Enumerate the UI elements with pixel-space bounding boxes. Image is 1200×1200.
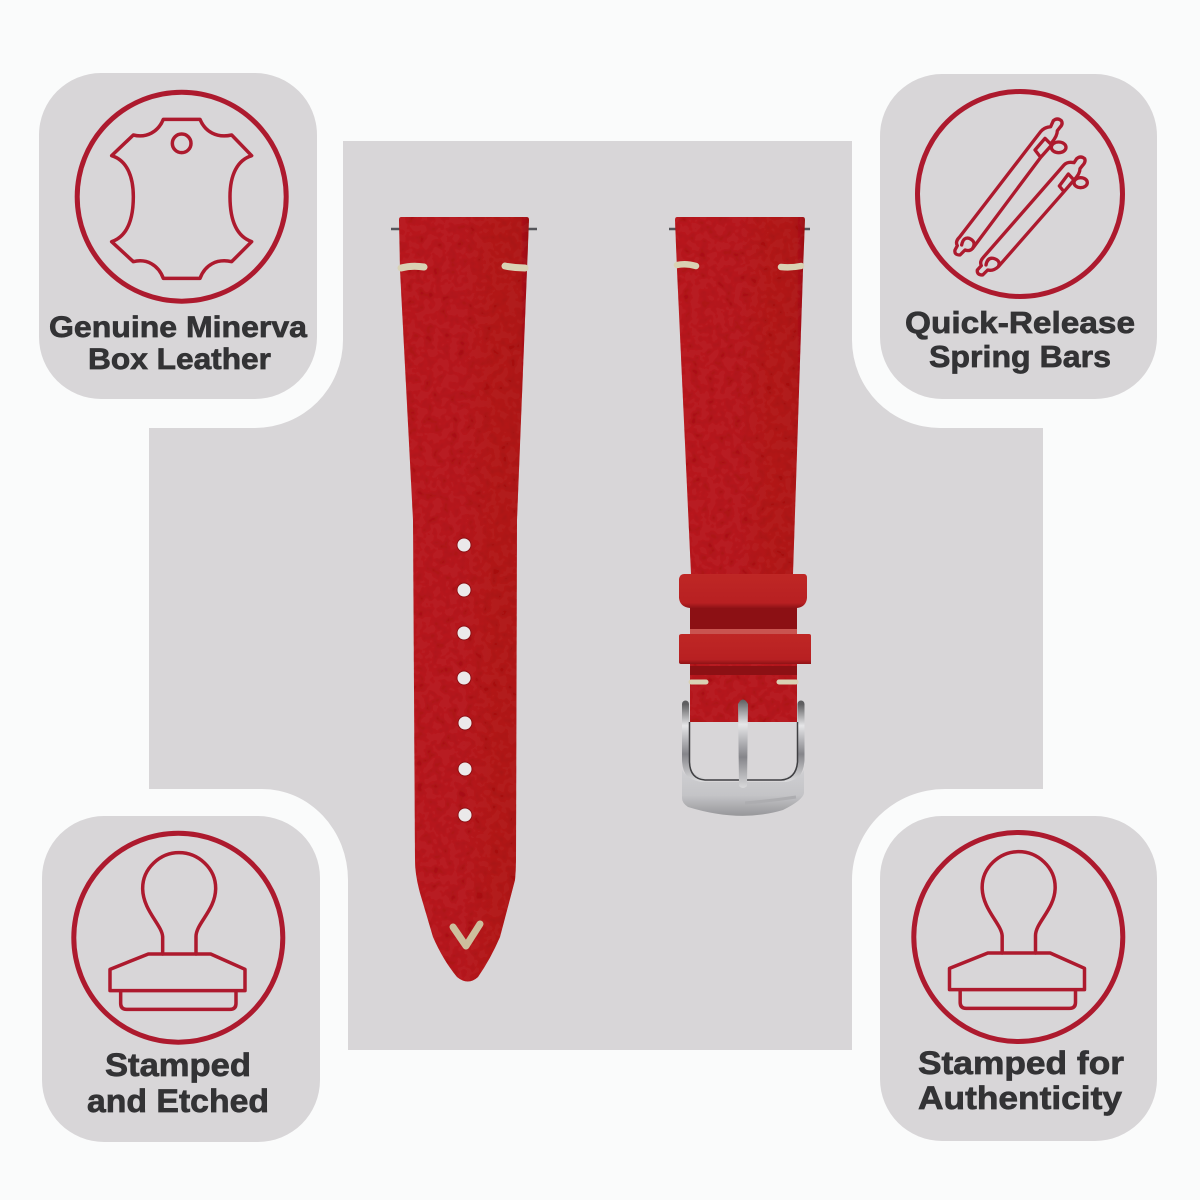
dark strap section between keepers bbox=[690, 604, 797, 638]
card background bbox=[39, 73, 317, 399]
card: genuine leather bbox=[39, 73, 317, 399]
leather body of buckle piece bbox=[675, 217, 805, 574]
buckle inner edge bbox=[690, 722, 798, 780]
stitches at top of long piece bbox=[401, 266, 525, 268]
card background bbox=[880, 74, 1157, 399]
card background bbox=[42, 816, 320, 1142]
central cross-shaped panel bbox=[149, 141, 1043, 1050]
card label: Stamped bbox=[105, 1047, 251, 1083]
card: stamped for authenticity bbox=[880, 816, 1157, 1141]
leather body of long piece bbox=[399, 217, 529, 982]
shadow under lower keeper bbox=[690, 666, 797, 675]
lower strap section bbox=[690, 664, 797, 722]
watch strap: buckle piece bbox=[669, 217, 811, 816]
stitches at top of buckle piece bbox=[677, 264, 801, 267]
keeper two bbox=[679, 634, 811, 664]
pin tips of long piece bbox=[391, 228, 537, 230]
engraved mark on buckle bbox=[745, 797, 796, 803]
card label: Quick-Release bbox=[905, 305, 1135, 340]
card label bbox=[905, 305, 1135, 374]
pin tips of buckle piece bbox=[669, 228, 810, 230]
card: spring bars bbox=[880, 74, 1157, 399]
buckle frame sides bbox=[686, 704, 801, 781]
card: stamped and etched bbox=[42, 816, 320, 1142]
icon: spring bars in circle bbox=[918, 92, 1122, 296]
card label: Box Leather bbox=[88, 343, 271, 376]
icon: stamp in circle bbox=[914, 832, 1123, 1042]
card label bbox=[49, 311, 307, 376]
V stitch at strap tip bbox=[453, 924, 480, 946]
card label: Genuine Minerva bbox=[49, 311, 307, 344]
card label: and Etched bbox=[87, 1083, 269, 1119]
buckle pin bbox=[738, 700, 748, 788]
card label: Stamped for bbox=[918, 1045, 1124, 1081]
watch strap: long piece bbox=[391, 217, 537, 982]
card label bbox=[918, 1045, 1124, 1116]
icon: leather hide in circle bbox=[77, 92, 286, 301]
light edge between keepers bbox=[690, 629, 797, 634]
buckle bottom plate bbox=[682, 770, 804, 816]
keeper one bbox=[679, 574, 807, 608]
icon: stamp in circle bbox=[74, 833, 283, 1042]
stitches near buckle bbox=[691, 680, 796, 684]
card background bbox=[880, 816, 1157, 1141]
card label: Spring Bars bbox=[929, 339, 1111, 374]
card label: Authenticity bbox=[918, 1080, 1122, 1116]
spring bar two bbox=[977, 157, 1087, 275]
spring bar one bbox=[955, 119, 1066, 255]
card label bbox=[87, 1047, 269, 1119]
strap holes bbox=[457, 538, 472, 822]
